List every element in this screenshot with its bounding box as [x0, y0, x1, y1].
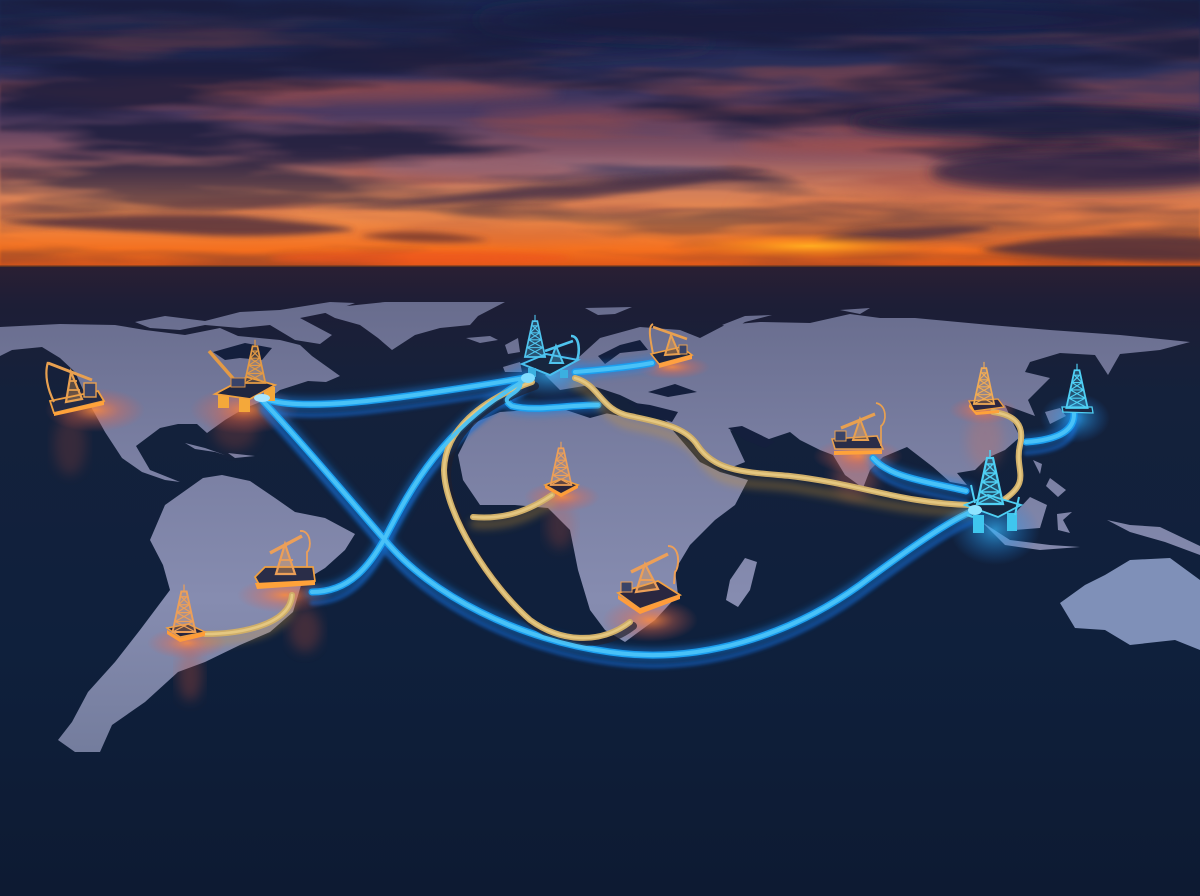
pipeline: yellow, Europe to South Africa — [447, 386, 633, 642]
icon: pumpjack, Russia west — [650, 324, 692, 368]
land: Iberia — [503, 362, 522, 372]
land: South America — [58, 475, 355, 752]
pipeline: yellow, Europe to Southeast Asia — [575, 378, 970, 505]
inland seas — [213, 340, 775, 448]
land: Java and Sumatra — [982, 522, 1080, 550]
pipeline: blue, Asia to Japan — [1026, 413, 1074, 442]
land: Arctic islands — [135, 302, 355, 344]
land: Japan — [1045, 408, 1066, 424]
icon: offshore platform, Southeast Asia — [965, 450, 1021, 533]
sea: Mediterranean — [538, 392, 612, 418]
icon: pumpjack, North America west — [46, 362, 104, 416]
yellow pipe highlights — [205, 378, 1021, 638]
sea: Hudson Bay — [213, 343, 272, 360]
pipeline network — [205, 363, 1074, 666]
blue pipeline reflections — [262, 389, 1074, 666]
land: Greenland — [318, 302, 505, 350]
icon: offshore platform, North America east — [209, 340, 275, 412]
icon: derrick, West Africa — [545, 442, 578, 497]
icon: pumpjack, Brazil — [255, 531, 315, 589]
world map landmasses — [0, 302, 1200, 752]
land: Iceland and Svalbard — [466, 307, 632, 343]
icon: pumpjack, South Africa — [618, 546, 680, 614]
lights at rig bases — [254, 373, 982, 515]
pipeline: blue, North America to Southeast Asia — [262, 400, 975, 655]
icon: twin Europe platform — [522, 315, 579, 378]
land: New Guinea — [1107, 520, 1200, 555]
bright pipe highlights — [262, 363, 1074, 655]
sea: Baltic — [598, 340, 648, 364]
sunset cloud layers — [0, 0, 1200, 268]
warm ground glows — [45, 351, 1110, 701]
land: Australia — [1060, 558, 1200, 650]
land: Madagascar — [726, 558, 757, 607]
pipeline: blue, India to Southeast Asia — [873, 458, 966, 491]
icon: derrick, Argentina — [167, 584, 205, 642]
icon: pumpjack, India — [832, 403, 885, 455]
sea: Persian Gulf — [728, 426, 775, 448]
land: British isles — [505, 338, 520, 354]
oil facility icons — [46, 315, 1093, 642]
pipeline: blue, South America to Europe — [312, 380, 525, 592]
land: Sulawesi — [1057, 512, 1072, 533]
pipeline: yellow, Korea to Southeast Asia — [993, 412, 1021, 499]
yellow pipeline glows — [205, 385, 970, 641]
icon: derrick, China — [969, 362, 1004, 415]
pipeline: yellow, South America link — [205, 595, 292, 634]
pipeline: blue, Europe to Russia — [575, 363, 652, 372]
land: North America — [0, 324, 340, 482]
sea background — [0, 267, 1200, 896]
land: Borneo — [1014, 497, 1047, 530]
sea: Eastern Mediterranean — [627, 402, 678, 422]
horizon line — [0, 266, 1200, 267]
land: Caribbean — [185, 443, 255, 458]
pipeline: blue, Mediterranean loop — [507, 380, 598, 408]
land: Arctic Europe — [722, 308, 870, 328]
pipeline: yellow, West Africa branch — [473, 495, 552, 518]
land: Africa — [458, 410, 748, 642]
sky background — [0, 0, 1200, 268]
land: Philippines — [1033, 460, 1066, 497]
icon: derrick, Japan — [1062, 364, 1093, 413]
blue pipeline glows — [262, 363, 1074, 655]
pipeline: blue, North America to Europe — [262, 378, 525, 404]
land: Eurasia — [545, 314, 1190, 488]
sea: Black Sea — [648, 384, 697, 397]
